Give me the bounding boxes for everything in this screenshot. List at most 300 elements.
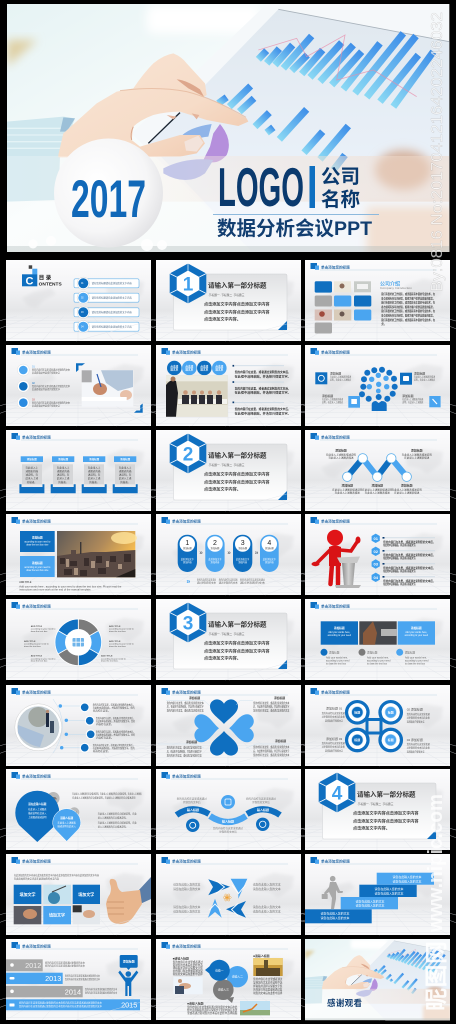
section text: 请输入第一部分标题: [208, 620, 267, 628]
tile grid: 填加文字: [49, 912, 65, 918]
three notes: according to your need: [326, 660, 350, 662]
step pills: 此处添加文字: [181, 557, 195, 561]
header: [310, 517, 437, 524]
pin percent chart: 描述说明在此录入: [28, 811, 47, 815]
header: [310, 602, 437, 610]
text and photo blocks: 框中选择粘贴并选择只保留文字您的内容打在这: [187, 1008, 238, 1012]
panels with photo: [321, 621, 435, 645]
running figure: [322, 876, 343, 909]
section text: 点击添加文字内容点击添加文字内容: [353, 818, 418, 824]
section text: 点击添加文字内容点击添加文字内容: [204, 308, 270, 314]
section text: 请输入第一部分标题: [208, 450, 267, 460]
step pills: 添加内容: [183, 560, 192, 564]
arrows between steps: »: [255, 550, 259, 556]
knot diagram: 标题: [354, 737, 360, 742]
numbered list: 01: [373, 536, 379, 541]
donut chart: [55, 619, 102, 666]
column cards: 此录入上述: [119, 476, 132, 480]
contents heading: ONTENTS: [39, 281, 62, 286]
three notes: Add your words here,: [326, 656, 348, 660]
header: [310, 857, 437, 864]
ribbon text: 复制您的文本后: [252, 800, 270, 804]
header: 单击添加您的标题: [172, 689, 201, 694]
donut labels: draw the text box: [31, 660, 48, 663]
section text: 点击添加文字内容。: [353, 824, 390, 830]
arrows between steps: [199, 550, 259, 556]
header: 单击添加您的标题: [22, 434, 51, 439]
section text: ·节标题一 ·节标题二 ·节标题三: [208, 293, 245, 297]
circle labels: 点击添: [200, 364, 209, 368]
slide: map pins: [0, 769, 230, 850]
bubbles: 请输一: [215, 968, 224, 972]
header: [12, 772, 138, 780]
text and photo blocks: ■请输入标题: [187, 1000, 204, 1006]
slide: section 3: [76, 599, 380, 680]
knot text: 选择粘贴只保留文字: [325, 748, 343, 752]
donut labels: ADD TITLE: [31, 625, 43, 628]
step pills: [178, 535, 279, 572]
circle labels: 加文本: [185, 368, 194, 372]
numbered list: 在此框中选择粘贴，并选择只保留文字。: [383, 569, 417, 573]
connector list: 在此框中选择粘贴，并选择只保留文字。您的: [96, 719, 135, 723]
side text: 在此录入上述图表的综合描述说明，在此: [98, 812, 137, 816]
zigzag labels: 在此录入上述图表描述说明: [362, 488, 393, 492]
zigzag labels: 添加标题: [342, 482, 353, 488]
callouts: 说明，在此录入上述图表: [330, 378, 351, 382]
knot text: 02 添加标题: [407, 706, 423, 712]
zigzag labels: 添加标题: [372, 482, 383, 488]
knot text: 04 添加标题: [407, 737, 423, 742]
panels with photo: Add your words here,: [328, 631, 351, 634]
text and photo blocks: 复制您的文本后在此框中选: [253, 980, 283, 984]
step pills: 添加内容: [211, 560, 220, 564]
bulleted paragraphs: [232, 365, 291, 415]
knot text: [322, 706, 430, 754]
callouts: 在此录入上述图表的描述: [322, 397, 343, 401]
knot text: 您的内容打在这里或者通: [407, 742, 430, 746]
side text: 在此录入上述图表的综合描述说明，在此录入上述图表的综合描述说明: [72, 796, 136, 800]
tile grid: 填加文字: [20, 891, 36, 897]
text and photo blocks: 您的内容打在这里或者通过复制您的文本后在此: [187, 1005, 238, 1009]
three notes: according to your need: [405, 660, 429, 662]
section text: ·节标题一 ·节标题二 ·节标题三: [208, 463, 245, 467]
section number: 2: [183, 444, 193, 466]
column cards: 述图表的描: [119, 469, 132, 473]
section text: 点击添加文字内容点击添加文字内容: [204, 300, 270, 306]
callouts: 在此录入上述图表的描述: [330, 375, 351, 379]
donut labels: draw the text box: [24, 645, 42, 648]
red presenter with lectern: [312, 530, 361, 588]
donut labels: according to your need to: [101, 657, 126, 660]
stair bars: 请您在此输入您的文本: [321, 915, 350, 920]
tile grid: [14, 885, 100, 924]
callouts: 添加标题: [322, 394, 333, 398]
hero panel: title slide: [7, 4, 453, 257]
column cards: [19, 456, 138, 493]
bulleted paragraphs: 您的内容打在这里，或者通过复制您的文本后，: [235, 385, 291, 390]
donut labels: draw the text box: [109, 630, 127, 633]
header: 单击添加您的标题: [22, 518, 51, 523]
heart text: 添加标题: [186, 740, 197, 744]
zigzag labels: 在此录入上述图表描述: [404, 456, 430, 460]
section number: 1: [183, 274, 194, 296]
side text: 在此录入上述图表的综合描述说明，在此录入上述图表的综合描述说明，在此录入上述图表: [72, 792, 142, 796]
callouts: 添加标题: [330, 372, 341, 376]
numbered list: 04: [373, 575, 379, 580]
ribbon text: [177, 796, 276, 834]
icon list: 01: [32, 366, 35, 368]
section text: 请输入第一部分标题: [208, 280, 267, 290]
header: 单击添加您的标题: [321, 264, 350, 269]
step pills: 添加内容: [238, 560, 248, 564]
section text: 点击添加文字内容点击添加文字内容: [204, 478, 270, 484]
slide: timeline: [0, 939, 230, 1020]
slide: wave ribbon: [76, 769, 380, 850]
column cards: 在此录入上: [57, 466, 70, 470]
contents list: 04: [81, 327, 84, 329]
step pills: 4: [267, 540, 271, 547]
year notes: 您的内容打在这里或者通过复制您的文本: [45, 960, 86, 964]
zigzag labels: [326, 447, 432, 494]
panels with photo: 添加标题: [411, 626, 422, 630]
donut labels: according to your need to: [109, 628, 134, 631]
company text: 我们有很好的工作团队，成员都具有丰富的专业技术，在: [381, 301, 435, 305]
header: [162, 517, 288, 524]
slide: thank you: [305, 939, 451, 1022]
donut labels: ADD TITLE: [109, 625, 121, 628]
text and photo blocks: ■请输入标题: [173, 956, 189, 960]
year bars: 2013: [45, 974, 61, 983]
closing text: 感谢观看: [327, 998, 362, 1008]
section text: ·节标题一 ·节标题二 ·节标题三: [208, 632, 245, 636]
arrow text: 请您在此输入您的文本: [253, 882, 281, 886]
subtitle: 数据分析会议PPT: [217, 218, 372, 240]
circle labels: 加文本: [215, 368, 224, 372]
column cards: 述说明，在: [57, 472, 70, 476]
bubbles: 请输入三: [218, 988, 229, 992]
icon list: 您的内容打在这里或者通过复制您的文本: [32, 384, 70, 388]
knot diagram: [347, 702, 401, 751]
donut labels: ADD TITLE: [109, 640, 121, 643]
watermark: file number: By:0816 No:20170412164202246032: [429, 12, 446, 292]
header: 单击添加您的标题: [172, 773, 201, 778]
photo: city at sunset: [57, 531, 137, 577]
section text: 点击添加文字内容点击添加文字内容: [204, 470, 270, 476]
contents list: 01: [81, 283, 84, 285]
icon list: 03: [32, 398, 35, 401]
text boxes: according to your need to: [24, 540, 51, 544]
watermark: site name: 昵图网: [423, 941, 449, 1011]
section text: [204, 280, 270, 322]
step pills: 添加标题: [238, 546, 248, 550]
donut labels: according to your need to: [109, 643, 134, 646]
year notes: 您的内容打在这里或者通过复制您的文本: [65, 977, 101, 981]
step pills: 1: [185, 540, 189, 547]
section text: 点击添加文字内容。: [204, 486, 241, 492]
photo tile grid: [315, 281, 371, 334]
panels with photo: according to your need: [405, 634, 429, 637]
numbered list: 您的内容打在这里，或者通过复制您的文本后，: [383, 579, 435, 583]
text and photo blocks: 制您的文本后在此框中选择: [253, 991, 283, 995]
watermark: site url: www.nipic.com: [425, 794, 447, 933]
section text: 点击添加文字内容。: [204, 654, 241, 660]
knot diagram: 标题: [388, 737, 394, 742]
donut labels: draw the text box: [109, 645, 127, 648]
zigzag labels: 在此录入上述图表描述说明: [332, 488, 363, 492]
year notes: 您的内容打在这里或者通过复制您的文本您的内容打在这里或者通过复制您的文本: [19, 1000, 103, 1004]
text boxes: [20, 531, 55, 577]
connector list: 您的内容打在这里，或者通过复制您的文本后，: [93, 702, 135, 706]
section text: ·节标题一 ·节标题二 ·节标题三: [357, 802, 394, 806]
stair bars: 请您在此输入您的文本: [356, 903, 385, 908]
connector list: 在此框中选择粘贴，并选择只保留文字。您的: [96, 732, 135, 736]
circle labels: 点击添: [170, 364, 179, 368]
company text: 我们有很好的工作团队，成员都具有丰富的专业技术，在: [381, 292, 435, 296]
callouts: 在此录入上述图表的描述: [402, 397, 424, 401]
step pills: 此处添加文字: [263, 557, 277, 561]
contents list: 02: [81, 298, 84, 300]
header: [12, 433, 138, 440]
heart text: 您的内容打在这里，或者通过复制您的文本: [253, 753, 290, 757]
arrow text: 请您在此输入您的文本: [173, 886, 200, 891]
icon list: 后选择粘贴并选择只保留文字: [32, 387, 60, 391]
heart text: 您的内容打在这里，或者通过复制您的文本: [167, 709, 204, 713]
year bars: 2014: [65, 987, 81, 996]
heart text: 后，在此框中选择粘贴，并选择只保留文字: [167, 749, 202, 753]
numbered list: 您的内容打在这里，或者通过复制您的文本后，: [383, 540, 435, 544]
bottom note: 您的内容打在这里或者: [197, 578, 216, 582]
column cards: 添加标题: [89, 457, 100, 461]
header: 单击添加您的标题: [172, 858, 201, 863]
three notes: according to your need: [367, 660, 391, 662]
ribbon text: 输入标题: [257, 807, 269, 812]
heart text: 后，在此框中选择粘贴，并选择只保留文字: [167, 705, 204, 709]
step pills: 添加标题: [183, 546, 192, 550]
column cards: 述图表的描: [88, 469, 101, 473]
donut labels: according to your need to: [31, 657, 56, 660]
icon list: 后选择粘贴并选择只保留文字: [32, 403, 60, 407]
icon list: 后选择粘贴并选择只保留文字: [32, 370, 60, 374]
stair bars: 请您在此输入您的文本: [356, 898, 385, 903]
connector list: 您的内容打在这里，或者通过复制您的文本后，: [96, 716, 135, 720]
bulleted paragraphs: 您的内容打在这里，或者通过复制您的文本后，: [235, 369, 291, 374]
slide: section 2: [76, 430, 380, 511]
four arrows: [208, 879, 247, 918]
logo wordmark: 公司: [321, 166, 360, 188]
ribbon text: 输入标题: [187, 807, 199, 812]
text and photo blocks: [173, 953, 283, 1015]
bottom note: [186, 578, 266, 586]
icon list: 您的内容打在这里或者通过复制您的文本: [32, 400, 70, 404]
ribbon text: 输入标题: [222, 818, 234, 823]
knot text: 选择粘贴只保留文字: [407, 720, 425, 724]
zigzag labels: 在此录入上述图表描述说明: [402, 452, 432, 456]
knot text: 过复制您的文本后在此框: [322, 744, 345, 748]
header: [12, 348, 138, 356]
header: 单击添加您的标题: [22, 773, 51, 778]
donut labels: ADD TITLE: [101, 655, 113, 658]
knot text: 过复制您的文本后在此框: [407, 746, 430, 750]
header: 单击添加您的标题: [172, 518, 201, 523]
contents heading: C: [26, 276, 34, 288]
caption: [19, 581, 122, 592]
callouts: [315, 372, 441, 408]
three notes: to draw the text box: [405, 662, 426, 666]
company text: 各自领域有多年的经验，能够为客户提供高质量的服务，: [381, 314, 435, 318]
knot text: 过复制您的文本后在此框: [407, 716, 430, 720]
heart text: 添加标题: [274, 696, 285, 700]
section number: 3: [183, 614, 193, 634]
stair bars: 请您在此输入您的文本: [393, 878, 422, 883]
company text: 我们有很好的工作团队，成员都具有丰富的专业技术，在: [381, 318, 435, 322]
column cards: 添加标题: [27, 457, 37, 461]
contents list: 请在您的标题请在此添加您的文字内容: [92, 325, 132, 329]
header: [310, 348, 437, 356]
connector list: 您的内容打在这里，或者通过复制您的文本后，: [96, 730, 135, 734]
arrow text: 请您在此输入您的文本: [173, 908, 200, 913]
column cards: 述说明，在: [119, 472, 132, 476]
arrow text: 请您在此输入您的文本: [253, 886, 281, 891]
slide: four hearts: [76, 685, 380, 766]
bulleted paragraphs: 在此框中选择粘贴，并选择只保留文字。: [235, 410, 291, 415]
header: 单击添加您的标题: [22, 858, 51, 863]
numbered list: [372, 534, 435, 586]
arrow text: 请您在此输入您的文本: [173, 882, 200, 886]
slide: four step pills: [76, 514, 380, 595]
bubbles: [205, 960, 248, 1003]
zigzag labels: 在此录入上述图表描述: [365, 490, 390, 494]
step pills: 此处添加文字: [208, 557, 222, 561]
icon list: 您的内容打在这里或者通过复制您的文本: [32, 368, 70, 372]
year notes: 您的内容打在这里或者通过复制您的文本: [85, 990, 118, 994]
circle labels: 点击添: [215, 364, 224, 368]
slide: contents: [0, 260, 230, 341]
heart clover: [194, 699, 254, 756]
heart text: 您的内容打在这里，或者通过复制您的文本: [167, 701, 204, 705]
slide: section 4: [225, 769, 456, 850]
year notes: 您的内容打在这里或者通过复制您的文本您的内容打在这里或者通过复制您的文本: [19, 1004, 103, 1008]
numbered list: 在此框中选择粘贴，并选择只保留文字。: [383, 543, 417, 547]
donut labels: according to your need to: [31, 628, 56, 631]
header: 单击添加您的标题: [22, 943, 51, 948]
header: 单击添加您的标题: [321, 518, 350, 523]
panels with photo: Add your words here,: [405, 631, 428, 634]
company text: 各自领域有多年的经验，能够为客户提供高质量的服务，: [381, 305, 435, 309]
donut labels: draw the text box: [31, 630, 48, 633]
column cards: 述图表的描: [57, 469, 70, 473]
knot text: 您的内容打在这里或者通: [322, 711, 345, 715]
step pills: 添加标题: [265, 546, 274, 550]
heart text: 您的内容打在这里，或者通过复制您的文本: [253, 745, 290, 749]
year notes: 您的内容打在这里或者通过复制您的文本: [85, 987, 118, 991]
text and photo blocks: 的内容打在这里或者通过复: [173, 969, 203, 973]
section text: 点击添加文字内容。: [204, 316, 241, 322]
slide: thumbs up: [0, 854, 230, 935]
ribbon text: 复制您的文本后: [219, 830, 237, 834]
circle labels: 加文本: [200, 368, 209, 372]
column cards: 述说明，在: [26, 472, 39, 476]
intro text: 在此添加您的文字内容在此添加您的文字内容: [14, 876, 59, 880]
section text: 点击添加文字内容点击添加文字内容: [353, 810, 418, 816]
slide: triple panel: [225, 599, 456, 680]
bottom note: 通过复制您的文本: [240, 580, 266, 584]
caption: instructions and more work at the end of the manual template.: [19, 588, 92, 592]
donut labels: ADD TITLE: [24, 640, 36, 643]
stair bars: 请您在此输入您的文本: [375, 890, 404, 895]
slide: icon list with photo: [0, 345, 230, 426]
header: 单击添加您的标题: [22, 689, 51, 694]
panels with photo: according to your need: [328, 634, 352, 637]
callouts: 说明，在此录入上述图表: [414, 378, 435, 382]
callouts: 添加标题: [414, 372, 425, 376]
slide: speech bubbles: [76, 939, 380, 1020]
photo: meeting: [166, 375, 228, 417]
pin percent chart: 描述说明在此录入: [58, 824, 77, 828]
column cards: 在此录入上: [26, 466, 39, 470]
heart text: 后，在此框中选择粘贴，并选择只保留文字: [253, 705, 290, 709]
year badge: [54, 138, 163, 248]
heart text: 您的内容打在这里，或者通过复制您的文本: [253, 709, 290, 713]
panels with photo: 添加标题: [334, 626, 345, 630]
knot text: 过复制您的文本后在此框: [322, 714, 345, 718]
zigzag chart: [343, 454, 411, 481]
bottom note: 您的内容打在这里或者通过: [240, 578, 265, 582]
slide: round photo list: [0, 685, 230, 766]
knot text: 选择粘贴只保留文字: [407, 750, 425, 754]
bottom note: 通过复制您的文本: [219, 580, 238, 584]
pin percent chart: [15, 791, 81, 842]
header: 单击添加您的标题: [321, 858, 350, 863]
column cards: 此录入上述: [26, 476, 39, 480]
side text: 录入上述图表的综合描述说明。: [98, 825, 128, 829]
contents list: 请在您的标题请在此添加您的文字内容: [92, 281, 132, 285]
header: [310, 433, 437, 440]
slide: section 1: [76, 260, 380, 341]
donut labels: according to your need to: [24, 643, 49, 646]
column cards: 的描述。: [120, 480, 130, 484]
icon tree: [359, 367, 398, 411]
header: 单击添加您的标题: [321, 349, 350, 354]
company text: 我们有很好的工作团队，成员都具有丰富的专业技术，在: [381, 309, 435, 313]
zigzag labels: 在此录入上述图表描述: [328, 456, 354, 460]
circle labels: 加文本: [170, 368, 179, 372]
slide: four columns: [0, 430, 230, 511]
figure with speech bubble: 添加标题: [123, 959, 135, 964]
bulleted paragraphs: 在此框中选择粘贴，并选择只保留文字。: [235, 373, 291, 378]
year bars: 2012: [25, 961, 41, 970]
figure with speech bubble: [118, 955, 138, 996]
knot text: 您的内容打在这里或者通: [407, 712, 430, 716]
zigzag labels: 在此录入上述图表描述说明: [326, 452, 356, 456]
header: 单击添加您的标题: [22, 349, 51, 354]
company text: 务。: [381, 322, 387, 326]
slide: company intro: [225, 260, 456, 341]
heart text: 添加标题: [189, 696, 200, 700]
numbered list: 在此框中选择粘贴，并选择只保留文字。: [383, 556, 417, 560]
column cards: 添加标题: [120, 457, 131, 461]
connector list: [53, 699, 135, 753]
header: 单击添加您的标题: [321, 603, 350, 608]
column cards: 在此录入上: [88, 466, 101, 470]
three notes: [320, 649, 429, 666]
header: [12, 942, 138, 950]
photo: writing hand: [76, 363, 143, 413]
slide: meeting photo: [76, 345, 380, 426]
zigzag labels: 在此录入上述图表描述: [394, 490, 420, 494]
section text: 请输入第一部分标题: [357, 790, 416, 798]
three notes: to draw the text box: [326, 662, 347, 666]
slide: stair steps: [225, 854, 456, 935]
